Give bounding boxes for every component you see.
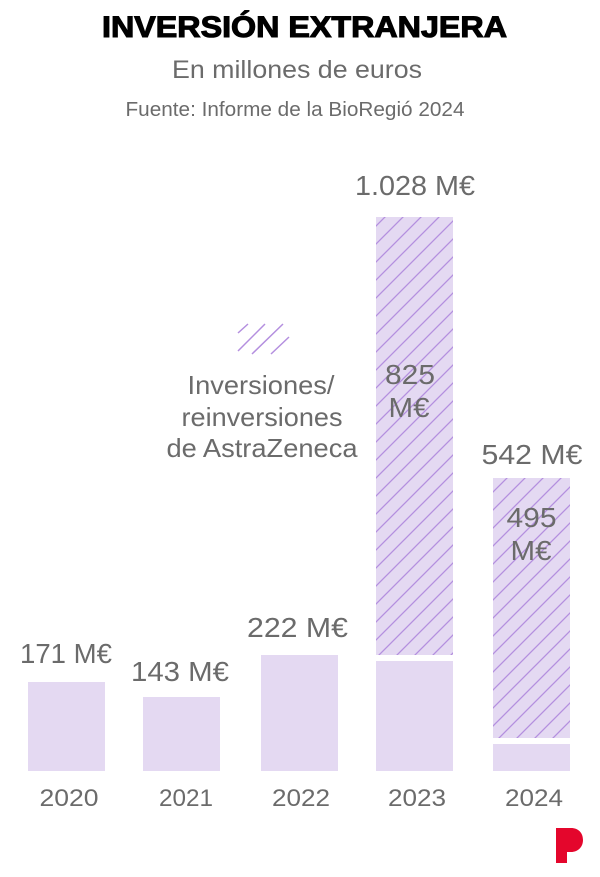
- bar 2024: M€: [510, 535, 552, 566]
- bar 2024: [482, 439, 583, 812]
- bar 2020: [20, 638, 112, 812]
- bar 2023: [355, 170, 475, 812]
- bar 2021: [131, 656, 229, 812]
- bar 2021: 2021: [159, 785, 213, 812]
- bar 2020: 2020: [40, 785, 98, 812]
- bar 2024: 2024: [505, 785, 563, 812]
- source: Fuente: Informe de la BioRegió 2024: [126, 99, 464, 121]
- bar 2024: 495: [506, 502, 556, 533]
- title: INVERSIÓN EXTRANJERA: [102, 10, 507, 44]
- bar 2022: 2022: [272, 785, 330, 812]
- bar 2023: 825: [385, 359, 435, 390]
- legend: AstraZeneca: [166, 324, 358, 463]
- bar 2020: 171 M€: [20, 638, 112, 669]
- legend text: Inversiones/: [188, 370, 335, 400]
- bar 2023: 1.028 M€: [355, 170, 475, 201]
- bar 2021: 143 M€: [131, 656, 229, 687]
- legend text: reinversiones: [182, 402, 342, 432]
- subtitle: En millones de euros: [172, 56, 422, 84]
- legend text: de AstraZeneca: [166, 433, 358, 463]
- legend text: [166, 370, 358, 463]
- bar 2024: 542 M€: [482, 439, 583, 470]
- legend hatch icon: [238, 324, 289, 354]
- bar 2022: [247, 612, 348, 812]
- icon: logo P: [556, 828, 583, 863]
- bar chart: [20, 170, 583, 812]
- bar 2023: M€: [388, 392, 430, 423]
- bar 2023: 2023: [388, 785, 446, 812]
- bar 2022: 222 M€: [247, 612, 348, 643]
